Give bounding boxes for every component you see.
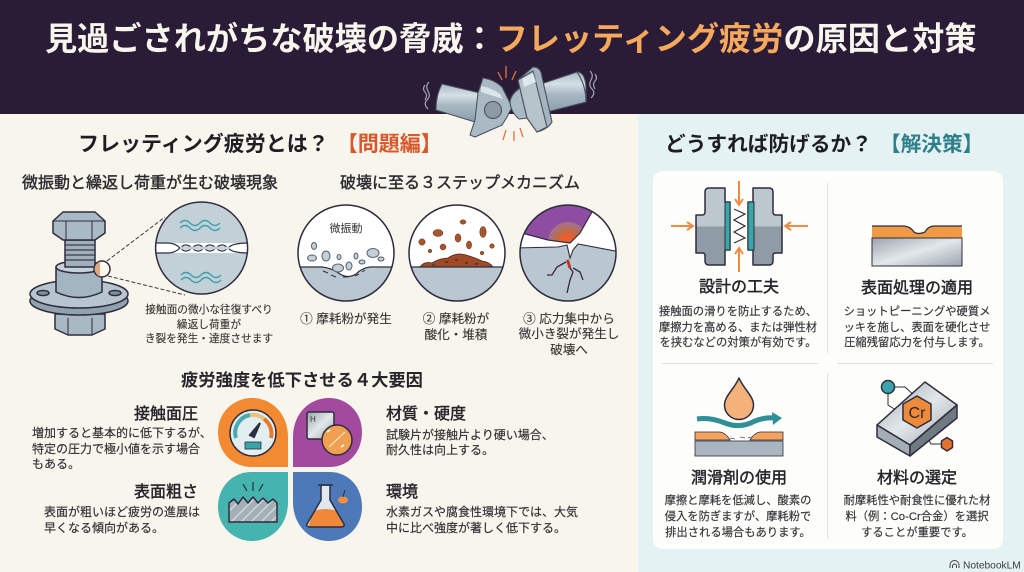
petal: surface roughness [218, 472, 288, 541]
subheading: four factors: 疲労強度を低下させる４大要因 [181, 370, 423, 390]
factor: surface roughness: 早くなる傾向がある。 [44, 520, 164, 535]
factor: material hardness: 試験片が接触片より硬い場合、 [386, 427, 554, 442]
solution: surface treatment: 表面処理の適用 [861, 279, 973, 297]
solution: material: 料（例：Co-Cr合金）を選択 [845, 509, 989, 523]
subheading: mechanism: 破壊に至る３ステップメカニズム [340, 174, 580, 192]
background: problem panel [0, 114, 638, 572]
step 2 illustration [408, 204, 506, 302]
heading: problem: フレッティング疲労とは？ 【問題編】 [78, 132, 442, 156]
footer: NotebookLM mark: NotebookLM [963, 560, 1021, 572]
title: 見過ごされがちな破壊の脅威：フレッティング疲労の原因と対策 [45, 21, 977, 57]
petal: material hardness [293, 398, 362, 467]
step 3 label: 破壊へ [550, 343, 588, 357]
solution: lubricant [665, 469, 811, 539]
solution: surface treatment [844, 279, 990, 349]
petal: material hardness: H [310, 415, 316, 424]
background: solution panel [638, 114, 1024, 572]
icon: material: Cr [909, 405, 926, 422]
step 2 label [423, 312, 490, 342]
step 3 label: 微小き裂が発生し [519, 327, 619, 341]
factor: environment [386, 483, 578, 535]
caption: phenomenon [145, 303, 273, 345]
step 1 illustration: 微振動 [330, 221, 362, 235]
factor: environment: 水素ガスや腐食性環境下では、大気 [386, 504, 578, 519]
step 3 label: ③ 応力集中から [523, 312, 615, 326]
heading: solution: どうすれば防げるか？ 【解決策】 [665, 133, 983, 156]
caption: phenomenon: 接触面の微小な往復すべり [145, 303, 273, 316]
factor: contact pressure: 増加すると基本的に低下するが、 [32, 425, 212, 440]
solution: design: を挟むなどの対策が有効です。 [659, 335, 817, 349]
step 1 label: ① 摩耗粉が発生 [300, 312, 392, 326]
solution: lubricant: 排出される場合もあります。 [665, 525, 811, 539]
factor: environment: 環境 [386, 483, 418, 501]
solution: design [659, 278, 817, 349]
factor: surface roughness [44, 483, 200, 535]
solution: design: 接触面の滑りを防止するため、 [659, 304, 817, 318]
step 2 label: 酸化・堆積 [425, 327, 488, 342]
solution: lubricant: 摩擦と摩耗を低減し、酸素の [665, 493, 811, 507]
icon: surface treatment [872, 226, 962, 266]
subheading: phenomenon: 微振動と繰返し荷重が生む破壊現象 [22, 174, 278, 192]
caption: phenomenon: 繰返し荷重が [177, 318, 241, 331]
solution: design: 設計の工夫 [699, 278, 779, 296]
solution: lubricant: 潤滑剤の使用 [691, 469, 787, 487]
solution: surface treatment: 圧縮残留応力を付与します。 [844, 335, 990, 349]
factor: environment: 中に比べ強度が著しく低下する。 [386, 520, 566, 535]
step 3 illustration [519, 204, 617, 302]
step 3 label [519, 312, 619, 357]
solution: surface treatment: ッキを施し、表面を硬化させ [844, 321, 990, 334]
illustration: bolt joint [30, 212, 185, 335]
solution: material: 耐摩耗性や耐食性に優れた材 [844, 493, 990, 507]
icon: design [671, 181, 808, 272]
icon: material [877, 380, 957, 456]
factor: material hardness: 耐久性は向上する。 [386, 442, 494, 457]
factor: material hardness [386, 405, 554, 457]
factor: surface roughness: 表面が粗いほど疲労の進展は [44, 504, 200, 519]
factor: contact pressure: もある。 [32, 457, 80, 471]
step 2 label: ② 摩耗粉が [423, 312, 490, 326]
factor: contact pressure: 特定の圧力で極小値を示す場合 [32, 441, 200, 456]
solutions card [653, 171, 1003, 549]
solution: material [844, 469, 990, 539]
header band [0, 0, 1024, 114]
caption: phenomenon: き裂を発生・達度させます [145, 332, 273, 345]
factor: contact pressure [32, 405, 212, 471]
icon: fretting joint [424, 66, 596, 141]
icon: lubricant [695, 378, 783, 456]
petal: environment flask [293, 472, 362, 541]
factor: contact pressure: 接触面圧 [134, 405, 198, 423]
solution: lubricant: 侵入を防ぎますが、摩耗粉で [665, 509, 811, 523]
solution: surface treatment: ショットピーニングや硬質メ [844, 304, 990, 318]
solution: design: 摩擦力を高める、または弾性材 [659, 320, 817, 334]
factor: material hardness: 材質・硬度 [386, 405, 466, 423]
step 1 illustration [295, 205, 400, 305]
petal: contact pressure gauge [218, 398, 288, 467]
illustration: contact magnified [155, 202, 249, 294]
factor: surface roughness: 表面粗さ [134, 483, 198, 501]
solution: material: することが重要です。 [861, 525, 973, 539]
solution: material: 材料の選定 [877, 469, 957, 487]
